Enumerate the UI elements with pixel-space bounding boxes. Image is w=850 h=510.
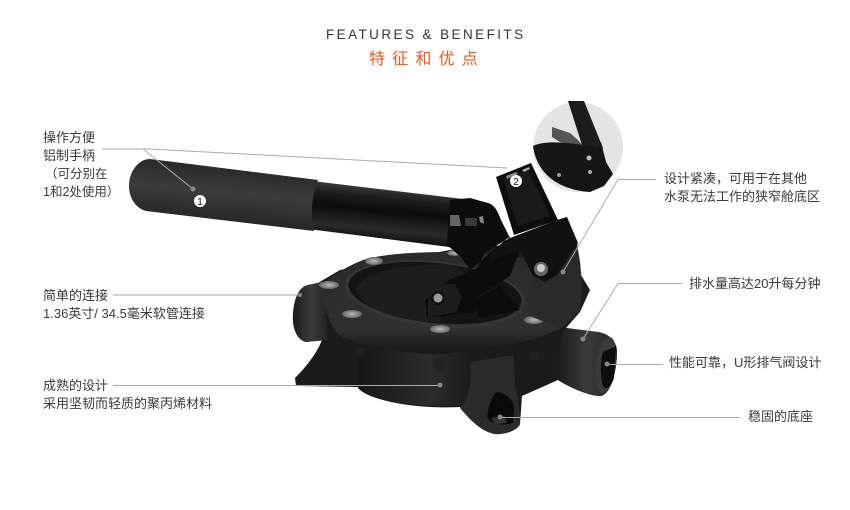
title: features and benefits: FEATURES & BENEFITS [326,27,526,42]
inset circle: compact view [533,101,623,192]
subtitle: Chinese heading: 特征和优点 [369,51,485,68]
lower flange bolts [355,346,365,356]
label: compact design: 设计紧凑，可用于在其他 [664,171,807,186]
label: simple connection [43,288,205,321]
right pivot tower [527,243,582,328]
foam grip [129,159,318,231]
left inlet port [293,282,328,342]
handle tube [308,181,463,248]
number badge 2: 2 [513,177,519,188]
leader lines [102,149,740,418]
lower bowl [358,350,478,406]
label: reliable valve: 性能可靠，U形排气阀设计 [669,355,821,370]
elbow arm [425,198,520,318]
pivot bolt [534,262,548,276]
label: easy to operate: 操作方便 [43,130,95,145]
flange [318,252,582,354]
pump body silhouette [293,240,617,434]
number badge 2 [510,175,522,188]
label: easy to operate: （可分别在 [45,167,108,181]
label: discharge rate: 排水量高达20升每分钟 [689,276,820,291]
leader dots [190,186,610,420]
label: easy to operate: 铝制手柄 [43,148,95,163]
number badge 1 [194,195,206,208]
label: simple connection: 1.36英寸/ 34.5毫米软管连接 [43,306,205,321]
label: easy to operate: 1和2处使用） [43,185,119,199]
socket bracket [490,217,578,282]
label: easy to operate [43,130,119,199]
label: simple connection: 简单的连接 [43,288,108,303]
label: stable base: 稳固的底座 [748,409,813,424]
label: proven design: 采用坚韧而轻质的聚丙烯材料 [43,396,212,411]
label: compact design [664,171,820,204]
lower link with bolt [428,284,462,318]
flange opening [341,252,529,336]
label: proven design [43,378,212,411]
number badge 1: 1 [197,197,203,208]
bolts [319,250,544,333]
label: proven design: 成熟的设计 [43,378,108,393]
right outlet port [557,328,620,396]
front foot with hole [460,355,520,434]
upper socket handle 2 [496,163,558,235]
label: compact design: 水泵无法工作的狭窄舱底区 [664,189,820,204]
